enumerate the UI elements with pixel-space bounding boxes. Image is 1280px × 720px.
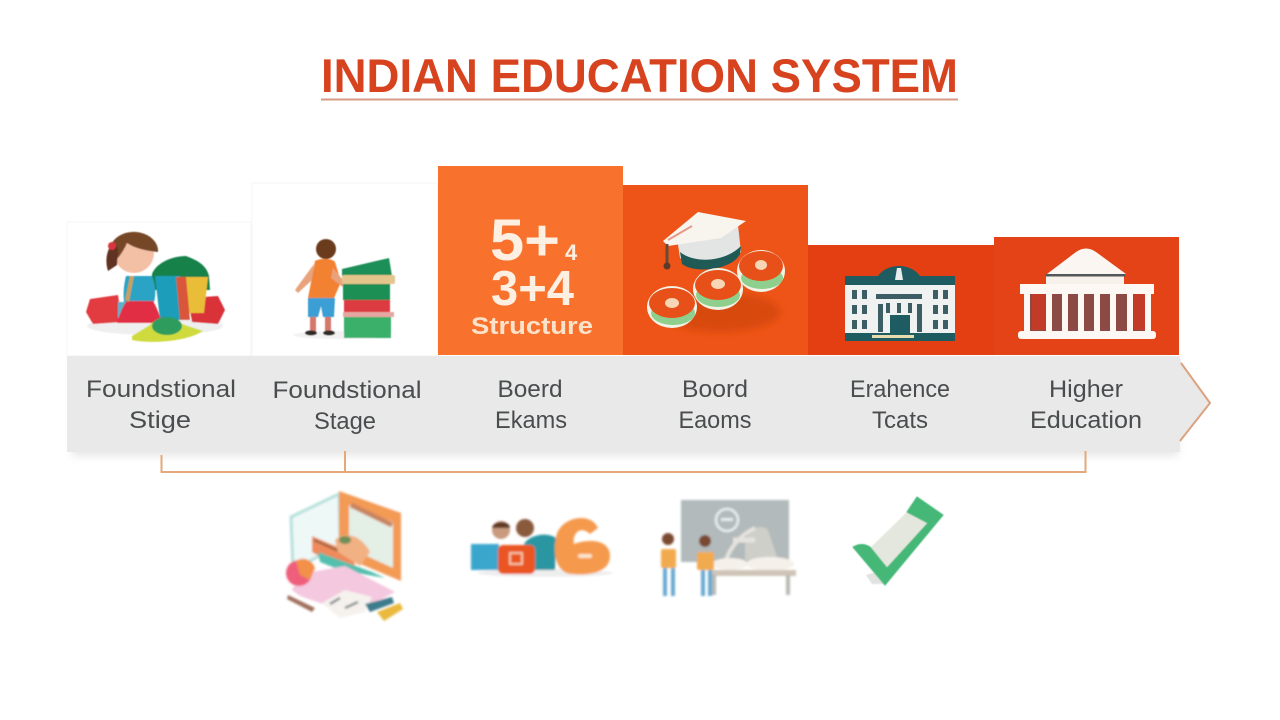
label: Foundational Stage 2: Stage	[314, 408, 376, 435]
card 4 deep orange background	[623, 185, 808, 355]
icon: open book with learning materials	[286, 491, 403, 621]
label: Board Exams 2: Eaoms	[678, 407, 752, 434]
label: Board Exams 1: Boerd	[498, 376, 562, 403]
card 6 red background	[994, 237, 1179, 355]
title: INDIAN EDUCATION SYSTEM	[321, 49, 958, 102]
card 5 red background	[808, 245, 994, 355]
icon: 5+3+3+4 structure text: 4	[565, 240, 578, 265]
icon: 5+3+3+4 structure text: 5+	[490, 208, 560, 273]
label: Foundational Stage 2: Foundstional	[272, 377, 422, 404]
icon: 5+3+3+4 structure text: 3+4	[491, 262, 574, 316]
label: Foundational Stage 1	[86, 376, 236, 434]
grey arrow band	[67, 356, 1210, 456]
label: Foundational Stage 2	[272, 377, 422, 435]
icon: child with toys	[86, 232, 225, 342]
bracket connector	[162, 451, 1086, 472]
icon: boy with books	[293, 239, 395, 339]
card 1 white background	[67, 222, 251, 356]
card 2 white background	[252, 183, 438, 356]
label: Higher Education	[1030, 376, 1142, 434]
card 3 orange background	[438, 166, 623, 355]
label: Board Exams 2: Boord	[682, 376, 748, 403]
label: Foundational Stage 1: Foundstional	[86, 376, 236, 403]
label: Entrance Tests	[850, 376, 950, 434]
label: Board Exams 2	[678, 376, 752, 434]
icon: 5+3+3+4 structure text: Structure	[471, 313, 593, 340]
token 3	[737, 250, 785, 292]
label: Higher Education: Higher	[1049, 376, 1123, 403]
panel: stage cards	[67, 166, 1179, 356]
label: Entrance Tests: Tcats	[872, 407, 928, 434]
icon: children with blocks	[471, 518, 613, 577]
label: Foundational Stage 1: Stige	[129, 407, 191, 434]
icon: teachers at whiteboard	[661, 500, 796, 596]
icon: university columns	[1018, 248, 1156, 339]
token 1	[647, 286, 697, 328]
label: Entrance Tests: Erahence	[850, 376, 950, 403]
label: Board Exams 1	[495, 376, 567, 434]
icon: school building	[845, 266, 955, 341]
token 2	[693, 268, 743, 310]
icon: green check mark	[853, 497, 943, 585]
label: Board Exams 1: Ekams	[495, 407, 567, 434]
icon: 5+3+3+4 structure text	[471, 208, 593, 340]
icon: graduation cap and tricolour tokens	[647, 212, 785, 332]
label: Higher Education: Education	[1030, 407, 1142, 434]
